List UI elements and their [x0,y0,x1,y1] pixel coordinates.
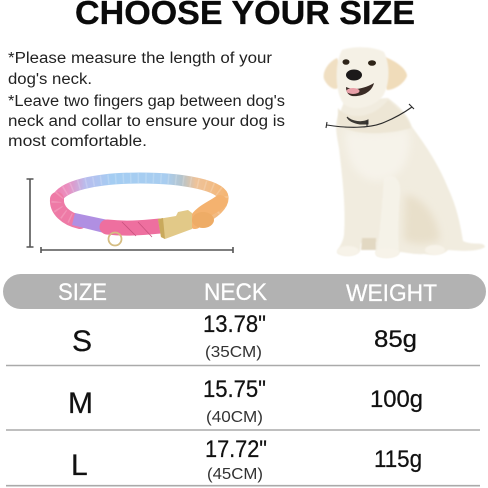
neck ruff [338,100,411,133]
row: size M: (40CM) [206,409,263,426]
row: size S: 85g [374,326,417,353]
table header bar [3,274,486,309]
row: size M [68,376,423,426]
ear left [324,58,341,89]
header labels: SIZE [58,279,107,306]
nose [346,70,362,80]
header labels: NECK [204,279,267,306]
row: size S: 13.78" [203,311,266,338]
measuring instructions [8,50,285,150]
rope twist marks [56,178,223,221]
front leg [376,176,400,257]
row: size S: (35CM) [205,344,262,361]
ear right [383,57,407,90]
measuring instructions: most comfortable. [8,133,147,150]
row: size M: 15.75" [203,376,266,403]
row: size S: S [72,325,92,358]
chest fur [345,128,410,181]
head [337,47,388,108]
gold buckle [158,210,192,239]
fur shading [404,195,440,244]
paws [337,245,445,258]
mouth and tongue [346,83,374,96]
purple wrap [72,213,108,233]
eyes [342,59,376,66]
row: size L: L [71,449,88,482]
measuring instructions: *Please measure the length of your [8,50,272,67]
height measure line [26,179,34,247]
row: size S [72,311,417,361]
header labels [58,279,437,307]
orange knot [195,202,220,222]
measuring instructions: neck and collar to ensure your dog is [8,113,285,130]
measuring instructions: *Leave two fingers gap between dog's [8,93,285,110]
dog body [336,98,485,258]
row: size L: 17.72" [205,436,267,463]
thicker lower left rope [57,199,80,222]
neck measure arc [326,104,414,128]
row: size L: 115g [374,446,422,473]
dog photo illustration [324,47,485,258]
header labels: WEIGHT [346,280,437,307]
row: size L: (45CM) [207,466,263,483]
rope loop [56,178,223,221]
metal ring [108,232,122,246]
row: size M: 100g [370,386,423,413]
dog collar [347,117,368,124]
row: size L [71,436,422,483]
collar illustration [26,178,233,253]
width measure line [41,247,233,253]
pink braided knot [107,226,160,228]
shadow between legs [361,238,376,250]
row: size M: M [68,387,93,420]
measuring instructions: dog's neck. [8,71,92,88]
